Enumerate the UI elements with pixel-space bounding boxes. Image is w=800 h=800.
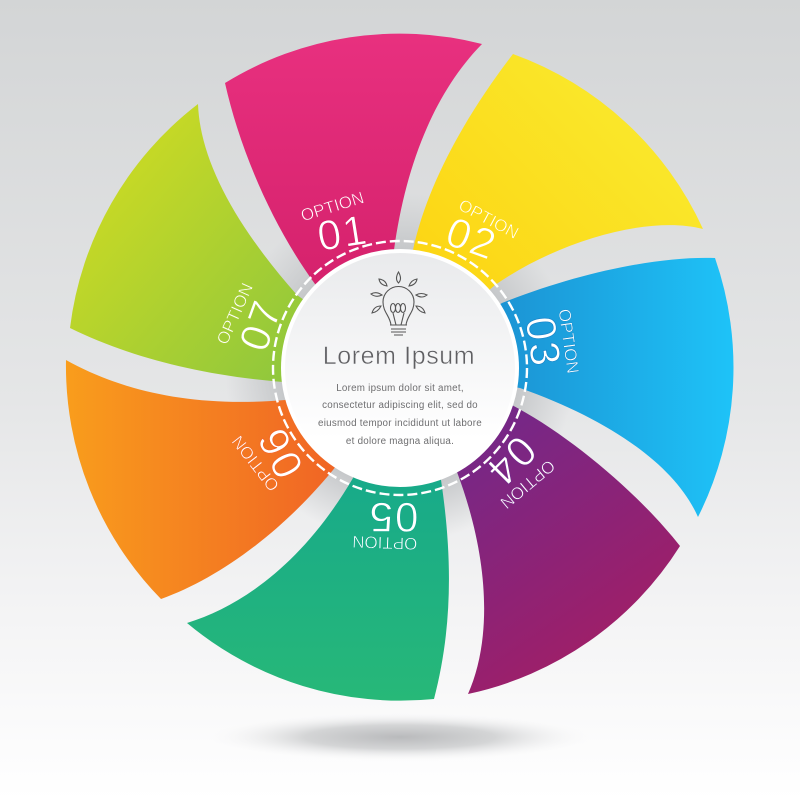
label 03 [517,308,582,375]
label 03: 03 [517,314,570,370]
label 02: 02 [440,208,504,269]
body text [318,383,482,447]
label 07 [213,280,291,357]
segment 02 [400,54,703,368]
segment 06 [66,360,400,599]
segment 01 [225,34,482,368]
segment 03 [400,258,733,517]
label 01 [298,188,371,260]
segment 07 [70,104,400,382]
label 04 [477,427,559,512]
label 06: OPTION [228,432,283,495]
label 06: 06 [248,419,313,486]
body text: eiusmod tempor incididunt ut labore [318,418,482,429]
hub shading [225,193,575,543]
ground shadow [210,713,590,761]
label 01: OPTION [298,188,366,225]
central disc [283,251,517,485]
label 05 [352,494,418,553]
label 05: 05 [368,494,418,541]
label 04: OPTION [496,456,559,512]
heading: Lorem Ipsum [323,342,475,370]
icon: light bulb [371,272,427,335]
label 02 [440,195,522,269]
body text: Lorem ipsum dolor sit amet, [336,383,464,394]
label 01: 01 [314,206,371,260]
dashed ring [273,241,527,495]
label 03: OPTION [555,308,582,375]
segment 05 [187,368,449,701]
label 02: OPTION [455,195,522,243]
label 06 [228,419,313,495]
label 05: OPTION [352,532,418,553]
label 04: 04 [477,427,546,496]
label 07: 07 [230,293,291,357]
label 07: OPTION [213,280,257,347]
body text: consectetur adipiscing elit, sed do [322,400,478,411]
body text: et dolore magna aliqua. [346,436,454,447]
segment 04 [400,368,680,694]
